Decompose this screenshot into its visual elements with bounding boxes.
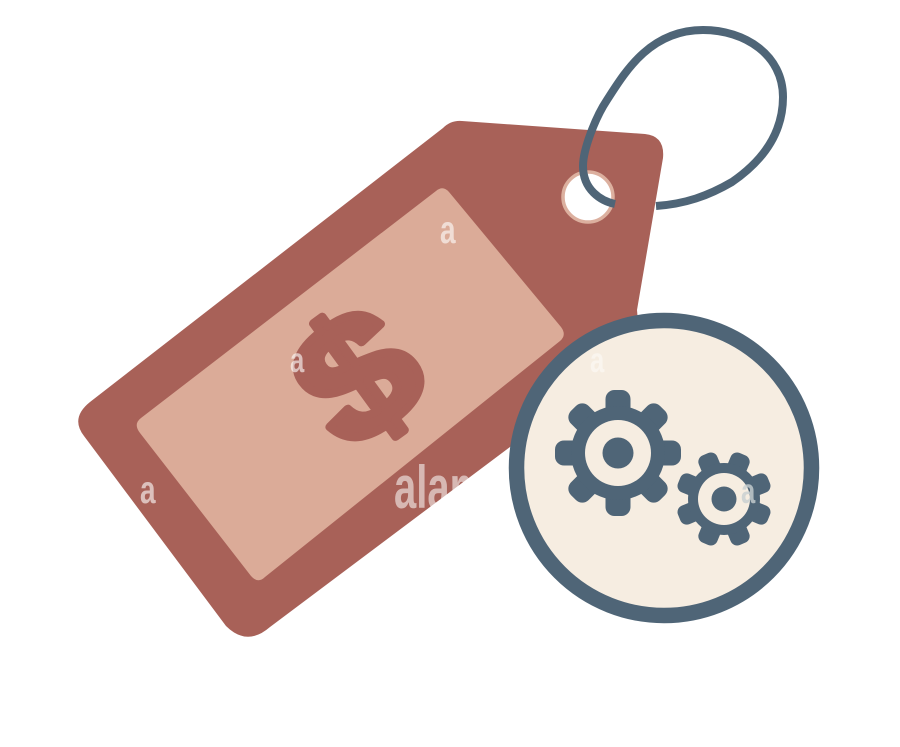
- tag eyelet hole: [563, 172, 613, 222]
- watermark letters: alam: [394, 454, 485, 521]
- dollar sign: $: [257, 266, 459, 486]
- tag body: [78, 121, 663, 637]
- tag inner label: [137, 188, 564, 580]
- watermark letters: a: [140, 468, 156, 512]
- icon: large gear: [555, 390, 681, 516]
- gears badge: [516, 320, 812, 616]
- watermark letters: a: [440, 208, 456, 252]
- badge circle: [516, 320, 812, 616]
- watermark letters: a: [290, 340, 305, 380]
- string loop: [583, 30, 783, 206]
- watermark letters: a: [590, 340, 605, 380]
- watermark letters: a: [741, 471, 756, 511]
- icon: small gear: [675, 450, 773, 548]
- price tag: [78, 121, 663, 637]
- watermark letters: [140, 208, 756, 521]
